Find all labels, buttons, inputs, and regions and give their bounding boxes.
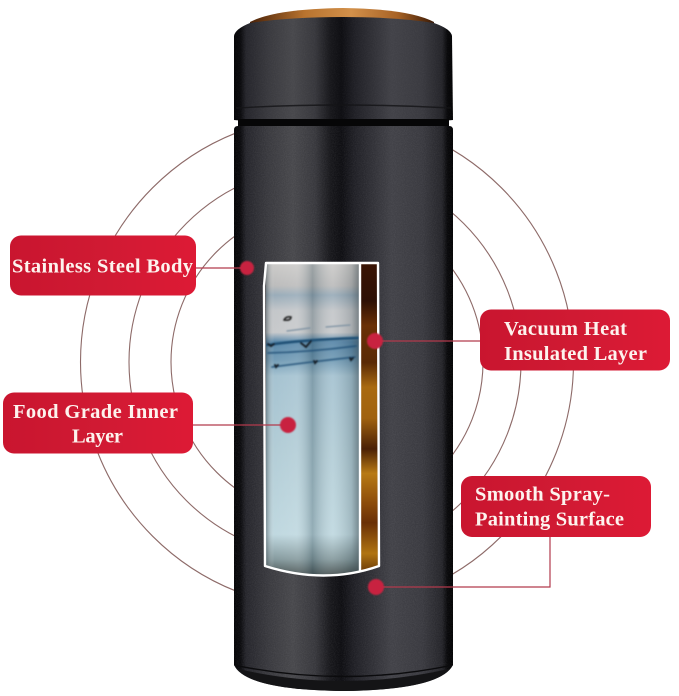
label: Vacuum Heat Insulated Layer [480,310,670,370]
label: Smooth Spray-Painting Surface: Smooth Spray- [475,484,610,506]
bottle lid copper top [250,8,434,28]
bottle body [234,126,453,696]
cap groove [236,105,451,108]
label: Stainless Steel Body [10,236,196,296]
cutaway window [264,263,379,576]
label: Smooth Spray-Painting Surface [461,476,651,537]
label: Smooth Spray-Painting Surface: Painting Surface [475,508,624,530]
connector lines [193,268,550,587]
label: Food Grade Inner Layer: Food Grade Inner [13,401,178,423]
label: Vacuum Heat Insulated Layer: Vacuum Heat [504,318,627,340]
label: Food Grade Inner Layer [3,392,193,454]
vacuum layer strip [361,264,378,572]
concentric rings background [80,116,574,608]
label: Vacuum Heat Insulated Layer: Insulated Layer [504,343,647,365]
bottle [234,8,454,696]
water ripples [267,317,358,367]
bottle cap [234,15,454,127]
marker dots [240,261,384,595]
label: Stainless Steel Body: Stainless Steel Body [12,256,194,278]
label: Food Grade Inner Layer: Layer [72,426,123,448]
water inner layer [266,264,359,575]
window frame [264,263,379,576]
